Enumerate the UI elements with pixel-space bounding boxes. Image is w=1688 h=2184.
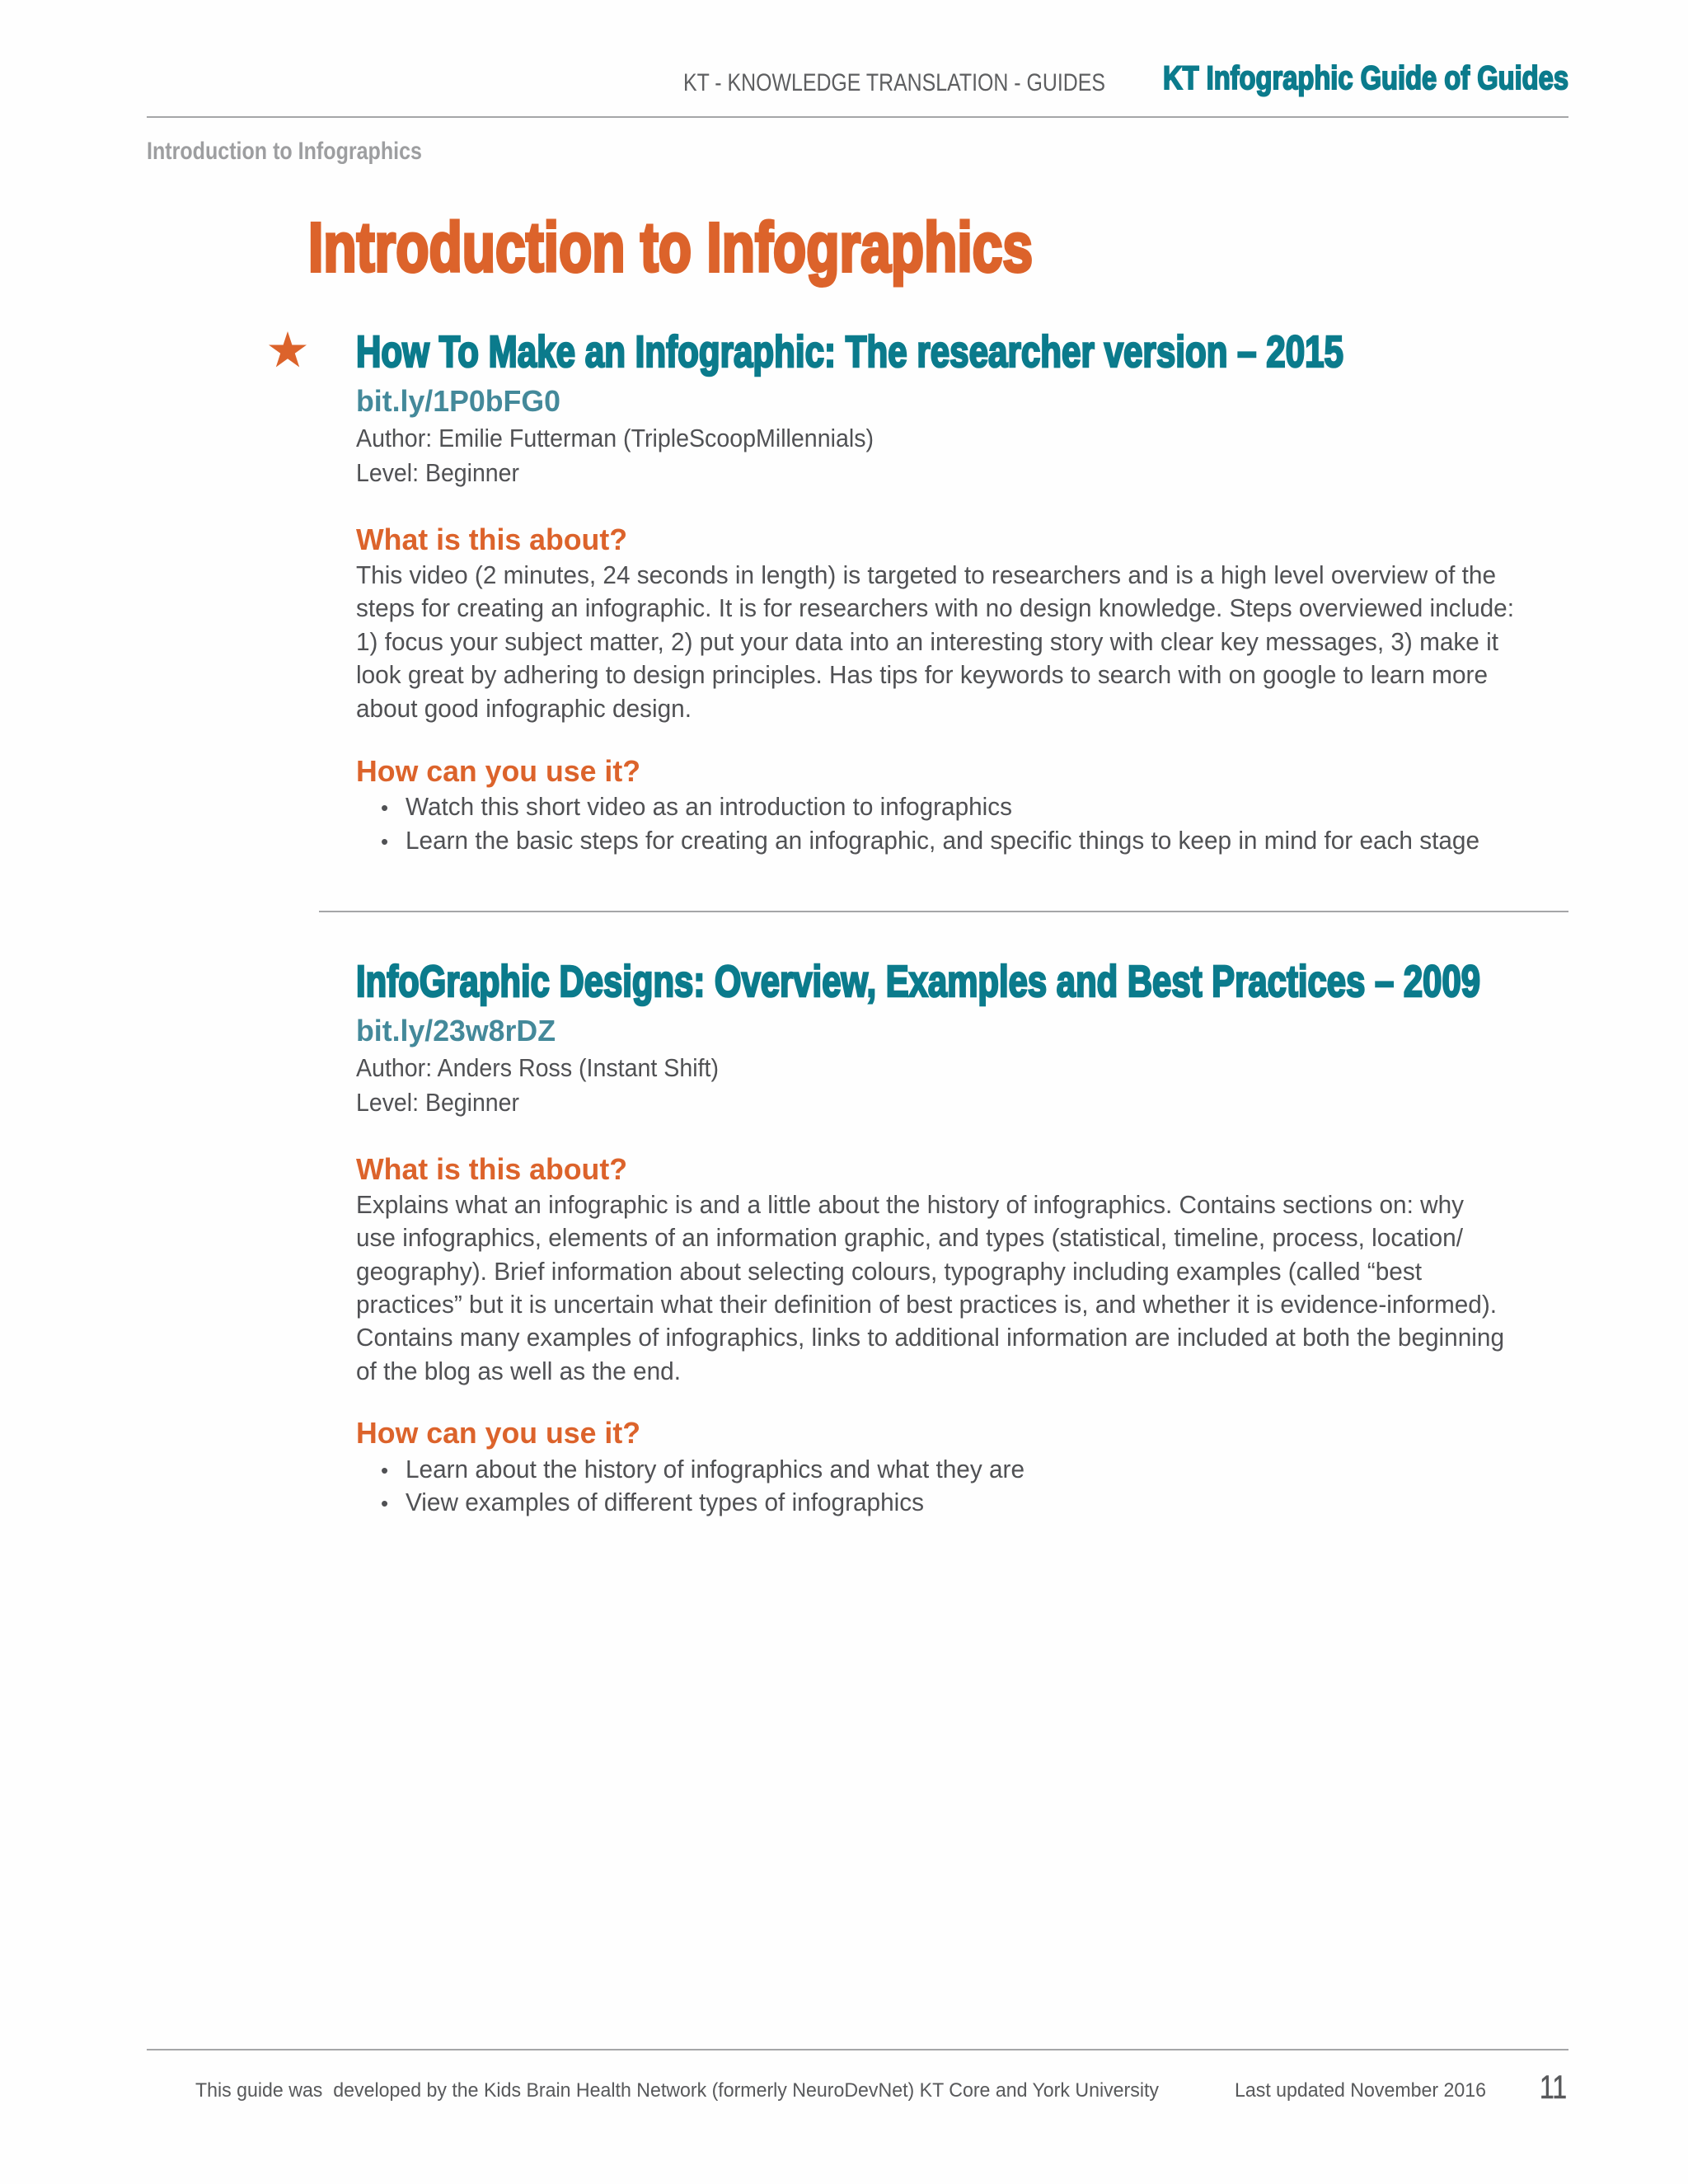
resource 2 description: practices” but it is uncertain what their definition of best practices is, and whether it is evidence-informed).	[356, 1290, 1497, 1319]
resource 2 description: Explains what an infographic is and a little about the history of infographics. Contains sections on: why	[356, 1190, 1464, 1219]
resource 1 title: How To Make an Infographic: The researcher version – 2015	[356, 327, 1343, 377]
header guide title: KT Infographic Guide of Guides	[1163, 60, 1568, 96]
resource 1 description: about good infographic design.	[356, 694, 692, 723]
resource 2 bullet list: •	[381, 1458, 388, 1483]
panel: resource 1	[269, 327, 1514, 855]
resource 1 level: Level: Beginner	[356, 458, 519, 487]
resource 1 description: steps for creating an infographic. It is for researchers with no design knowledge. Steps overviewed include:	[356, 593, 1514, 622]
page footer	[195, 2069, 1567, 2106]
resource 2 author: Author: Anders Ross (Instant Shift)	[356, 1053, 719, 1082]
resource 2 description: of the blog as well as the end.	[356, 1357, 681, 1385]
header label: KT - KNOWLEDGE TRANSLATION - GUIDES	[683, 69, 1105, 96]
resource 1 description: This video (2 minutes, 24 seconds in length) is targeted to researchers and is a high level overview of the	[356, 560, 1496, 589]
page number: 11	[1540, 2069, 1567, 2106]
resource 2 level: Level: Beginner	[356, 1088, 519, 1117]
heading: what is this about: What is this about?	[356, 1152, 627, 1186]
resource 2 bullet list: Learn about the history of infographics and what they are	[406, 1455, 1025, 1483]
resource 2 description: Contains many examples of infographics, links to additional information are included at both the beginning	[356, 1323, 1504, 1352]
resource 1 bullet list	[381, 792, 1479, 855]
resource 1 bullet list: •	[381, 795, 388, 820]
heading: how can you use it: How can you use it?	[356, 1416, 640, 1450]
resource 2 link: bit.ly/23w8rDZ	[356, 1014, 556, 1047]
resource 1 link: bit.ly/1P0bFG0	[356, 384, 560, 418]
resource 1 description: 1) focus your subject matter, 2) put your data into an interesting story with clear key messages, 3) make it	[356, 627, 1498, 656]
resource 2 description: use infographics, elements of an information graphic, and types (statistical, timeline, process, location/	[356, 1223, 1463, 1252]
resource 1 description	[356, 560, 1514, 723]
page title: Introduction to Infographics	[308, 209, 1033, 286]
heading: what is this about: What is this about?	[356, 523, 627, 556]
resource 1 description: look great by adhering to design principles. Has tips for keywords to search with on google to learn more	[356, 660, 1488, 689]
panel: resource 2	[356, 957, 1504, 1516]
resource 1 author: Author: Emilie Futterman (TripleScoopMillennials)	[356, 424, 874, 452]
footer credit: This guide was developed by the Kids Brain Health Network (formerly NeuroDevNet) KT Core and York University	[195, 2079, 1160, 2102]
heading: how can you use it: How can you use it?	[356, 754, 640, 788]
page header	[683, 60, 1568, 96]
resource 2 bullet list: •	[381, 1491, 388, 1516]
icon: star	[269, 331, 307, 368]
resource 2 bullet list	[381, 1455, 1025, 1516]
resource 2 bullet list: View examples of different types of infographics	[406, 1488, 924, 1516]
resource 1 bullet list: Watch this short video as an introduction to infographics	[406, 792, 1012, 821]
section breadcrumb: Introduction to Infographics	[147, 138, 422, 165]
resource 1 bullet list: Learn the basic steps for creating an infographic, and specific things to keep in mind for each stage	[406, 826, 1479, 855]
resource 2 description	[356, 1190, 1504, 1385]
resource 2 description: geography). Brief information about selecting colours, typography including examples (called “best	[356, 1257, 1422, 1286]
resource 1 bullet list: •	[381, 829, 388, 854]
footer date: Last updated November 2016	[1235, 2079, 1486, 2102]
